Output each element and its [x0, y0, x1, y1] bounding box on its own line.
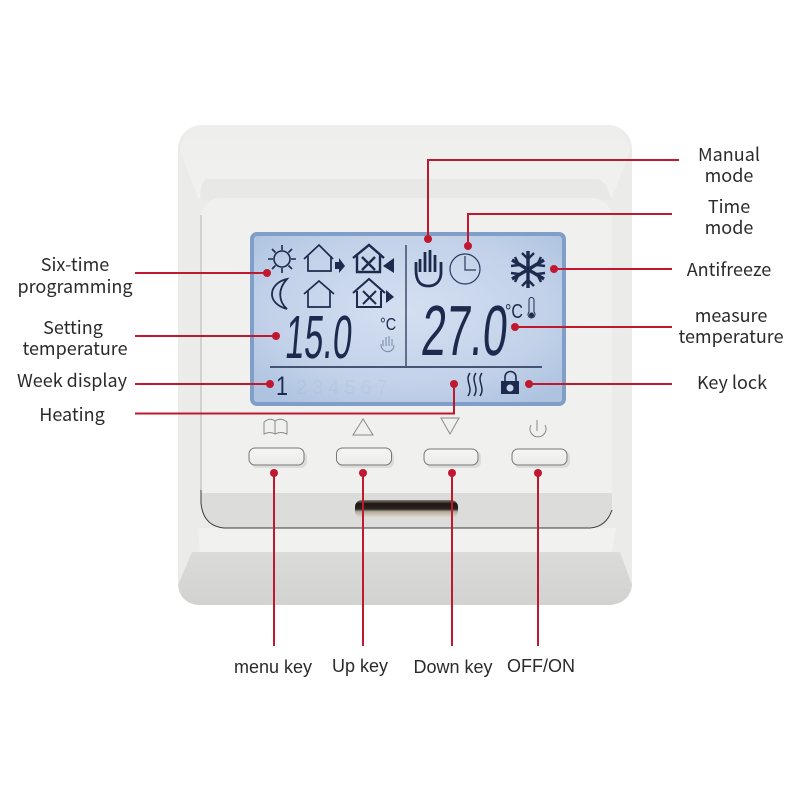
- label: measure temperature: temperature: [678, 323, 784, 349]
- callout line: off/on: [534, 469, 542, 646]
- faceplate lower shade: [201, 493, 612, 528]
- callout lines and dots: [135, 160, 679, 646]
- label: setting temperature: Setting: [43, 314, 103, 340]
- label: up key: Up key: [332, 656, 388, 676]
- label: heating: Heating: [39, 401, 105, 427]
- faceplate side line: [200, 215, 202, 490]
- label: antifreeze: Antifreeze: [687, 256, 771, 282]
- frame ridge: [200, 179, 612, 200]
- up button: [336, 448, 392, 465]
- callout line: time mode: [464, 214, 672, 250]
- setting temperature value: 15.0: [283, 303, 355, 372]
- frame bottom face: [178, 552, 632, 605]
- callout line: setting temperature: [135, 332, 280, 340]
- icon: book: [264, 419, 287, 434]
- icon: heating waves: [468, 373, 482, 396]
- icon: power: [530, 420, 546, 437]
- label: off/on: OFF/ON: [507, 656, 575, 676]
- label: key lock: Key lock: [697, 369, 767, 395]
- icon: house at home: [304, 281, 334, 307]
- icon: snowflake: [511, 251, 545, 288]
- icon: thermometer: [528, 298, 535, 318]
- week display number: 1: [276, 372, 288, 402]
- label: down key: Down key: [413, 657, 493, 677]
- button shadows: [251, 451, 570, 468]
- faceplate edge line: [201, 490, 612, 528]
- icon: key lock: [501, 372, 519, 394]
- finger slot: [355, 500, 458, 518]
- callout line: heating: [135, 380, 458, 414]
- LCD divider vertical: [405, 245, 407, 366]
- callout line: measure temperature: [511, 323, 672, 331]
- icon: sun: [268, 245, 296, 273]
- faint week segments: 234567: [296, 377, 393, 399]
- icon: house with cutlery, arrow out: [353, 279, 394, 307]
- icon: moon: [272, 279, 287, 309]
- callout line: down key: [448, 469, 456, 646]
- label: time mode: mode: [705, 214, 753, 240]
- thermostat device: [178, 125, 632, 605]
- device outer frame: [178, 125, 632, 605]
- icon: down triangle: [441, 418, 459, 434]
- icon: small hand: [381, 336, 394, 352]
- icon: up triangle: [353, 419, 373, 435]
- frame lower bevel: [198, 528, 616, 552]
- LCD bezel: [250, 232, 566, 406]
- icon: manual hand: [416, 250, 441, 286]
- label: manual mode: Manual: [698, 141, 760, 167]
- callout line: key lock: [525, 380, 672, 388]
- callout line: six-time programming: [135, 269, 271, 277]
- inner faceplate: [201, 198, 612, 528]
- label: six-time programming: Six-time: [41, 251, 109, 277]
- measured temperature value: 27.0: [419, 290, 511, 371]
- setting temperature unit: °C: [380, 315, 396, 334]
- down button: [424, 449, 478, 465]
- label: six-time programming: programming: [17, 273, 133, 299]
- menu button: [249, 448, 304, 465]
- power button: [512, 449, 567, 465]
- label: setting temperature: temperature: [22, 335, 128, 361]
- label: measure temperature: measure: [695, 302, 767, 328]
- callout line: manual mode: [424, 160, 679, 243]
- frame top face: [180, 125, 630, 198]
- callout line: menu key: [270, 469, 278, 646]
- icon: clock: [450, 254, 480, 284]
- callout line: antifreeze: [550, 265, 672, 273]
- callout line: week display: [135, 380, 274, 388]
- measured temperature unit: °C: [505, 300, 523, 322]
- label: week display: Week display: [17, 367, 128, 393]
- LCD panel: [254, 236, 562, 402]
- LCD screen: [250, 232, 566, 406]
- callout line: up key: [359, 469, 367, 646]
- LCD divider horizontal: [270, 366, 542, 368]
- label: manual mode: mode: [705, 162, 753, 188]
- label: menu key: menu key: [234, 657, 312, 677]
- label: time mode: Time: [708, 193, 750, 219]
- icon: house leaving: [304, 245, 345, 273]
- icon: house with cutlery, arrow in: [353, 245, 394, 273]
